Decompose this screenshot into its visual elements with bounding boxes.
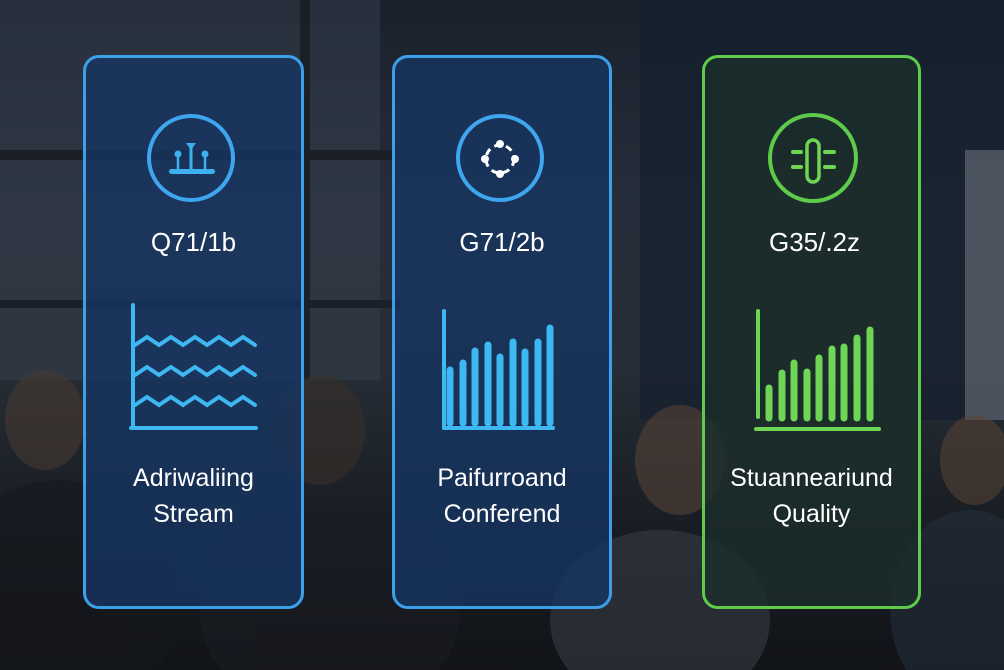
text: name: Adriwaliing <box>133 464 254 492</box>
chart: rising bars <box>754 309 881 431</box>
chart: bars <box>442 309 555 430</box>
label: G35/.2z: G35/.2z <box>769 227 860 257</box>
text: name: Stuanneariund <box>730 464 893 492</box>
icon: antenna circle <box>147 114 235 202</box>
chart: wave lines <box>129 303 258 430</box>
label: G71/2b: G71/2b <box>459 227 545 257</box>
text: name <box>133 464 254 528</box>
icon: dotted circle <box>456 114 544 202</box>
text: name: Stream <box>153 500 234 528</box>
panel: Stuanneariund Quality <box>702 55 921 609</box>
text: name: Paifurroand <box>437 464 567 492</box>
panel: Adriwaliing Stream <box>83 55 304 609</box>
label: Q71/1b: Q71/1b <box>151 227 236 257</box>
text: name: Quality <box>773 500 850 528</box>
text: name <box>730 464 893 528</box>
icon: capsule <box>768 113 858 203</box>
panel: Paifurroand Conferend <box>392 55 612 609</box>
text: name: Conferend <box>444 500 560 528</box>
text: name <box>437 464 567 528</box>
